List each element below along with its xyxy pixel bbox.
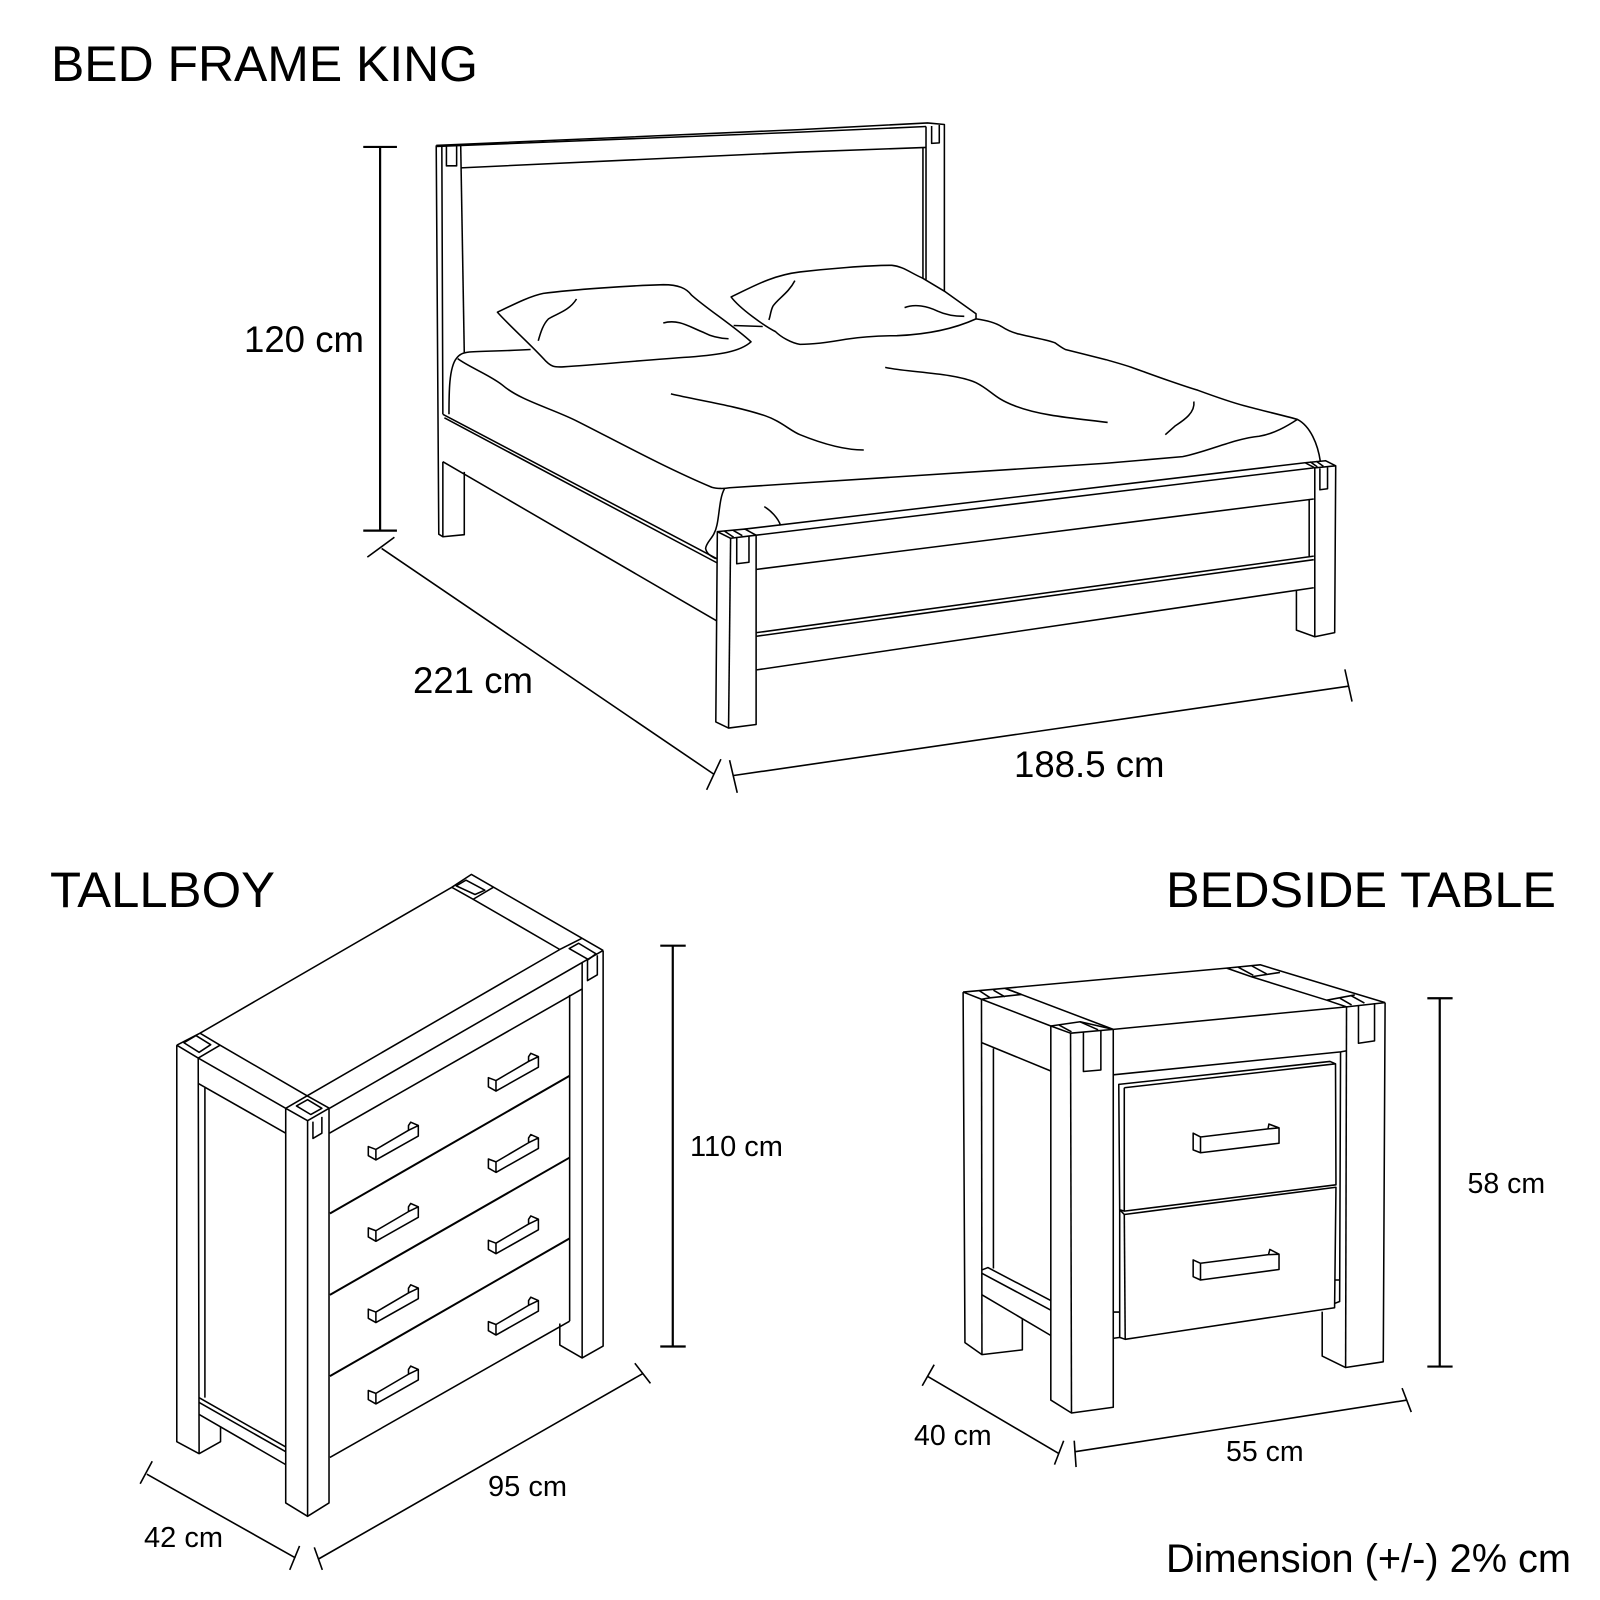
dimension: height 110 cm <box>660 946 686 1346</box>
footnote: dimension tolerance: Dimension (+/-) 2% cm <box>1166 1537 1571 1581</box>
side rail <box>443 414 717 621</box>
dimension: height 120 cm <box>363 147 397 531</box>
dimension: width 188.5 cm <box>730 669 1352 793</box>
label: 58 cm: 58 cm <box>1468 1168 1545 1200</box>
right post <box>560 950 603 1358</box>
left post and side panel <box>177 1045 286 1465</box>
foot rail <box>745 463 1314 670</box>
front rail and carcass <box>1113 1051 1346 1338</box>
dimension: depth 42 cm <box>140 1461 300 1570</box>
diagram: tallboy <box>140 874 686 1570</box>
top surface <box>177 874 603 1115</box>
label: 110 cm: 110 cm <box>690 1131 783 1163</box>
diagram: bed frame king <box>363 123 1352 793</box>
label: 55 cm: 55 cm <box>1226 1436 1304 1468</box>
dimension: height 58 cm <box>1427 998 1453 1367</box>
mattress and bedding <box>449 319 1320 559</box>
dimension: length 221 cm <box>367 537 721 790</box>
table top <box>963 965 1385 1029</box>
front rail <box>329 950 603 1133</box>
drawers <box>330 1076 570 1457</box>
pillow: right <box>731 265 976 344</box>
label: 188.5 cm: 188.5 cm <box>1014 744 1164 785</box>
drawer handles <box>368 1053 538 1404</box>
headboard <box>436 123 944 537</box>
diagram: bedside table <box>922 965 1453 1467</box>
label: 95 cm: 95 cm <box>488 1471 567 1503</box>
label: 221 cm: 221 cm <box>413 660 533 701</box>
title: bed frame king: BED FRAME KING <box>51 36 478 92</box>
label: 42 cm: 42 cm <box>144 1522 223 1554</box>
dimension: width 95 cm <box>314 1363 650 1570</box>
front left post <box>1051 1022 1113 1413</box>
dimension: depth 40 cm <box>922 1365 1064 1465</box>
upper drawer <box>1119 1061 1336 1211</box>
label: 40 cm: 40 cm <box>914 1420 992 1452</box>
dimension: width 55 cm <box>1074 1388 1411 1467</box>
title: bedside table: BEDSIDE TABLE <box>1166 862 1556 918</box>
front corner post <box>286 1096 329 1516</box>
back left post and side frame <box>963 992 1051 1355</box>
pillow: left <box>497 285 751 367</box>
front right post <box>1296 461 1336 637</box>
title: tallboy: TALLBOY <box>50 862 275 918</box>
label: 120 cm: 120 cm <box>244 319 364 360</box>
front left post <box>716 529 756 728</box>
right post <box>1322 1003 1385 1368</box>
lower drawer <box>1120 1187 1336 1339</box>
